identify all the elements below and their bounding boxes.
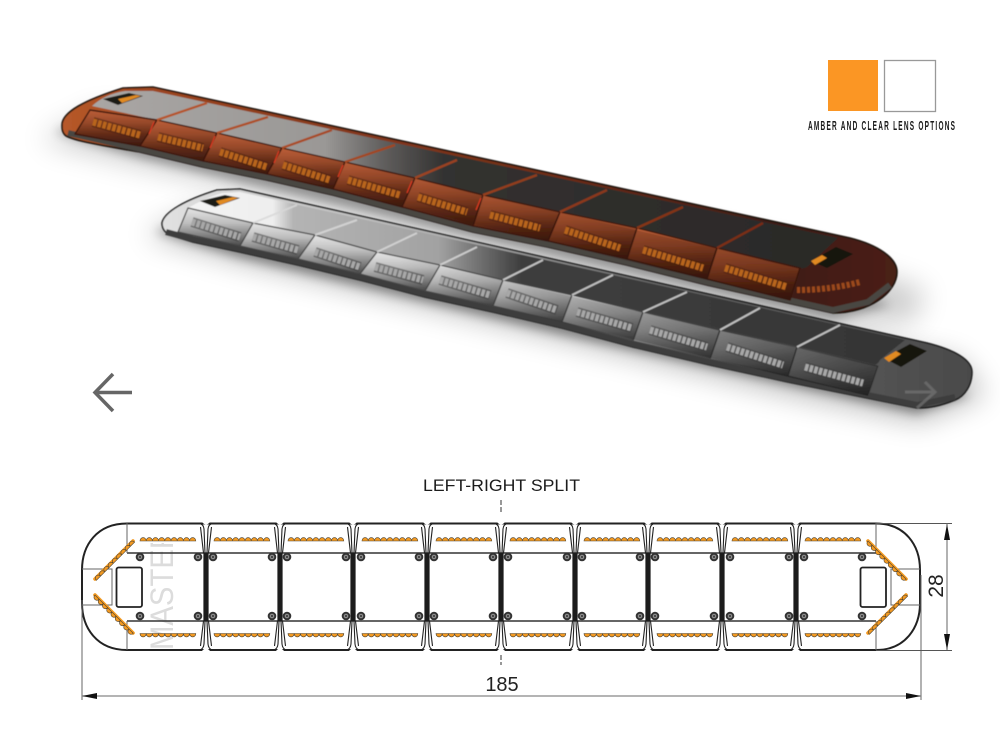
- amber bar front shading: [267, 148, 800, 300]
- dimension: overall length: [82, 575, 921, 700]
- amber bar left badge accent: [118, 95, 141, 103]
- amber bar top panel: [92, 91, 838, 268]
- top LED rows: [140, 538, 861, 541]
- bottom LED rows: [140, 634, 861, 637]
- clear bar lower trim: [166, 232, 955, 405]
- clear bar right badge: [884, 344, 927, 367]
- length right arrow: [906, 693, 921, 699]
- dimension: height: [876, 523, 952, 650]
- clear bar left badge: [200, 195, 240, 207]
- technical drawing: [82, 500, 920, 665]
- amber light bar: [62, 87, 897, 313]
- right badge outline: [860, 568, 886, 607]
- diagonal LED rows: [93, 540, 908, 636]
- length value: 185: [485, 674, 519, 696]
- amber bar front lenses: [75, 110, 800, 300]
- back arrow: [95, 374, 132, 411]
- clear bar front lenses: [178, 208, 878, 396]
- clear bar right badge accent: [884, 351, 901, 362]
- shadows under light bars: [40, 110, 985, 422]
- amber bar right cap LEDs: [797, 282, 860, 290]
- end cap construction lines: [82, 523, 920, 650]
- clear bar LED backing: [192, 222, 863, 383]
- left badge outline: [116, 568, 142, 607]
- height dimension line: [946, 523, 948, 650]
- clear bar top panel: [188, 192, 905, 365]
- length dimension line: [82, 695, 921, 697]
- centre split line: [500, 500, 502, 665]
- clear bar body: [162, 189, 972, 408]
- height top arrow: [944, 524, 950, 540]
- heading: left-right split: LEFT-RIGHT SPLIT: [423, 476, 580, 495]
- mounting screws: [136, 553, 866, 620]
- amber bar body: [62, 87, 897, 313]
- clear bar LED modules: [192, 222, 863, 383]
- length extension lines: [82, 575, 921, 700]
- clear bar left badge accent: [216, 197, 238, 205]
- amber bar LED backing: [93, 122, 787, 287]
- amber bar red junction highlights: [149, 122, 481, 210]
- height extension lines: [876, 524, 952, 650]
- swatch caption: AMBER AND CLEAR LENS OPTIONS: [808, 120, 955, 134]
- clear light bar: [162, 189, 972, 408]
- height bottom arrow: [944, 634, 950, 650]
- junctions: [199, 522, 803, 651]
- amber bar LED modules: [93, 122, 787, 287]
- amber bar left badge: [103, 93, 143, 105]
- carousel arrow over clear bar: [905, 382, 935, 408]
- lens colour swatches and caption: [808, 60, 955, 134]
- amber bar panel dividers: [157, 103, 763, 248]
- height value: 28: [925, 574, 948, 598]
- inner panel lines: [127, 553, 876, 621]
- clear swatch: [884, 60, 936, 112]
- length left arrow: [82, 693, 97, 699]
- clear bar front shading: [360, 252, 878, 396]
- bar outline: [82, 524, 920, 650]
- amber bar lower trim: [68, 133, 890, 310]
- clear bar panel dividers: [253, 205, 840, 347]
- amber bar right badge accent: [811, 255, 827, 265]
- master watermark: MASTER: [144, 528, 180, 650]
- amber swatch: [828, 60, 878, 111]
- amber bar right badge: [811, 247, 853, 268]
